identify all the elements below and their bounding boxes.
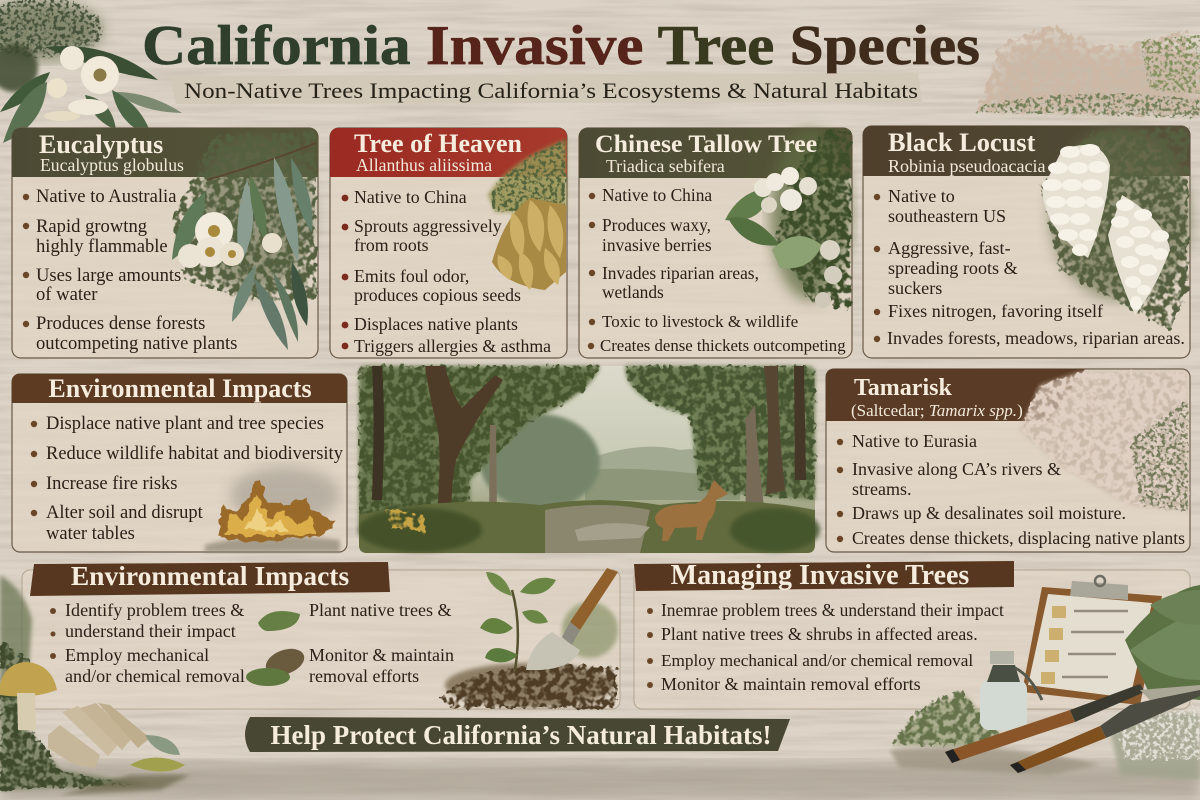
icon: leaves bbox=[246, 611, 308, 686]
text: action list: removal efforts bbox=[309, 666, 419, 686]
text: Eucalyptus facts: Produces dense forests bbox=[36, 313, 205, 334]
header band: Chinese Tallow Tree bbox=[579, 128, 852, 178]
text: Black Locust facts: suckers bbox=[888, 278, 942, 298]
text: Tamarisk facts bbox=[837, 431, 1185, 548]
icon: deer bbox=[655, 480, 728, 541]
decoration: right foliage bbox=[1125, 585, 1200, 700]
text: Chinese Tallow facts: wetlands bbox=[602, 282, 664, 302]
text: Eucalyptus facts: highly flammable bbox=[36, 236, 168, 257]
text: Chinese Tallow facts: Produces waxy, bbox=[602, 215, 711, 235]
text: Tree of Heaven facts bbox=[342, 187, 551, 356]
text: Black Locust facts: spreading roots & bbox=[888, 258, 1018, 278]
text: Tamarisk facts: Creates dense thickets, displacing native plants bbox=[852, 528, 1185, 548]
panel: Black Locust bbox=[863, 126, 1190, 358]
header: Environmental Impacts bbox=[30, 560, 390, 596]
icon: black locust flowers bbox=[1040, 128, 1190, 330]
text: Black Locust facts: southeastern US bbox=[888, 206, 1006, 226]
text: Tree of Heaven facts: Triggers allergies & asthma bbox=[354, 336, 551, 356]
text: Tree of Heaven facts: Native to China bbox=[354, 187, 467, 207]
text: impact list bbox=[31, 414, 344, 544]
text: managing list: Inemrae problem trees & understand their impact bbox=[661, 600, 1004, 620]
header: Environmental Impacts: Environmental Impacts bbox=[48, 374, 312, 403]
text: action list: Identify problem trees & bbox=[65, 600, 244, 620]
text: Black Locust facts bbox=[874, 186, 1185, 348]
text: Eucalyptus facts: Native to Australia bbox=[36, 186, 176, 207]
header band: Eucalyptus bbox=[12, 128, 318, 177]
text: Tamarisk facts: Native to Eurasia bbox=[852, 431, 977, 451]
text: Eucalyptus facts: of water bbox=[36, 284, 98, 305]
header text: Eucalyptus bbox=[39, 130, 184, 175]
header band: Tree of Heaven bbox=[330, 128, 567, 177]
header: Tamarisk: Tamarisk bbox=[854, 375, 952, 401]
text: Black Locust facts: Native to bbox=[888, 186, 955, 206]
panel: Environmental Impacts (upper) bbox=[12, 374, 347, 552]
text: managing list: Plant native trees & shrubs in affected areas. bbox=[661, 624, 978, 644]
text: Black Locust facts: Aggressive, fast- bbox=[888, 238, 1011, 258]
icon: tree of heaven seed clusters bbox=[488, 140, 566, 290]
header text: Eucalyptus: Eucalyptus globulus bbox=[40, 155, 184, 175]
text: action list: Monitor & maintain bbox=[309, 645, 454, 665]
header: Managing Invasive Trees: Managing Invasive Trees bbox=[671, 560, 969, 591]
header: Environmental Impacts: Environmental Impacts bbox=[71, 560, 349, 591]
panel: Tree of Heaven bbox=[330, 128, 567, 358]
decoration: top-right blossoms bbox=[975, 25, 1200, 118]
header: Tamarisk bbox=[826, 369, 1085, 421]
text: Tamarisk facts: streams. bbox=[852, 479, 911, 499]
text: Chinese Tallow facts: Creates dense thickets outcompeting bbox=[600, 336, 846, 355]
text: Tree of Heaven facts: Sprouts aggressively bbox=[354, 216, 502, 236]
text: Chinese Tallow facts: Toxic to livestock & wildlife bbox=[602, 312, 798, 331]
icon: tallow berries bbox=[725, 130, 851, 310]
text: Chinese Tallow facts bbox=[588, 185, 846, 355]
text: action list: understand their impact bbox=[65, 621, 236, 641]
text: Tree of Heaven facts: produces copious seeds bbox=[354, 285, 521, 305]
icon: sprayer bottle bbox=[980, 651, 1042, 730]
text: Eucalyptus facts bbox=[23, 186, 237, 354]
text: impact list: Reduce wildlife habitat and biodiversity bbox=[46, 444, 344, 464]
text: Tamarisk facts: Draws up & desalinates soil moisture. bbox=[852, 503, 1126, 523]
icon: tamarisk shrub bbox=[1020, 372, 1188, 512]
text: Chinese Tallow facts: Native to China bbox=[602, 185, 712, 205]
text: Chinese Tallow facts: Invades riparian areas, bbox=[602, 263, 759, 283]
text: Tree of Heaven facts: Emits foul odor, bbox=[354, 266, 469, 286]
text: impact list: Displace native plant and tree species bbox=[46, 414, 324, 434]
header band: Black Locust bbox=[863, 126, 1190, 176]
text: managing list bbox=[647, 600, 1004, 694]
panel: Eucalyptus bbox=[12, 128, 318, 358]
banner: call to action: Help Protect California’s Natural Habitats! bbox=[271, 720, 771, 750]
text: action list: and/or chemical removal bbox=[65, 666, 245, 686]
text: Chinese Tallow facts: invasive berries bbox=[602, 235, 712, 255]
text: Tree of Heaven facts: from roots bbox=[354, 235, 429, 255]
decoration: left foliage, mushroom and gloves bbox=[0, 575, 190, 795]
header text: Black Locust: Robinia pseudoacacia bbox=[888, 156, 1045, 176]
text: impact list: Increase fire risks bbox=[46, 474, 178, 494]
header text: Eucalyptus: Eucalyptus bbox=[39, 130, 163, 159]
header text: Chinese Tallow Tree: Triadica sebifera bbox=[606, 156, 725, 176]
text: managing list: Employ mechanical and/or chemical removal bbox=[661, 651, 973, 670]
text: Tamarisk facts: Invasive along CA’s rivers & bbox=[852, 459, 1061, 479]
header text: Tree of Heaven: Allanthus aliissima bbox=[356, 155, 492, 175]
header text: Tree of Heaven: Tree of Heaven bbox=[354, 129, 523, 158]
icon: seedling and trowel bbox=[440, 568, 618, 708]
text: managing list: Monitor & maintain removal efforts bbox=[661, 674, 921, 694]
text: impact list: water tables bbox=[46, 524, 135, 544]
header text: Black Locust: Black Locust bbox=[888, 127, 1036, 157]
header text: Tree of Heaven bbox=[354, 129, 523, 175]
subtitle banner: Non-Native Trees Impacting California’s Ecosystems & Natural Habitats bbox=[184, 78, 918, 103]
decoration: top-left eucalyptus flowers bbox=[0, 0, 182, 143]
icon: pruning shears bbox=[945, 684, 1200, 773]
text: Eucalyptus facts: Rapid growtng bbox=[36, 216, 147, 237]
text: Eucalyptus facts: Uses large amounts bbox=[36, 265, 181, 286]
header text: Chinese Tallow Tree bbox=[595, 129, 817, 176]
panel: Tamarisk bbox=[826, 369, 1190, 552]
icon: clipboard checklist bbox=[1022, 576, 1162, 705]
text: Eucalyptus facts: outcompeting native plants bbox=[36, 333, 237, 354]
panel: Managing Invasive Trees bbox=[634, 560, 1190, 709]
icon: fire bbox=[205, 467, 340, 552]
decoration: bottom-right ground and flowers bbox=[890, 690, 1200, 780]
header text: Chinese Tallow Tree: Chinese Tallow Tree bbox=[595, 129, 817, 158]
panel: Chinese Tallow Tree bbox=[579, 128, 852, 358]
header: Tamarisk: (Saltcedar; Tamarix spp.) bbox=[851, 401, 1023, 420]
title: California Invasive Tree Species bbox=[142, 15, 980, 77]
header text: Black Locust bbox=[888, 127, 1045, 176]
text: Tree of Heaven facts: Displaces native plants bbox=[354, 314, 518, 334]
text: action list: Employ mechanical bbox=[65, 645, 209, 665]
text: Black Locust facts: Invades forests, meadows, riparian areas. bbox=[887, 328, 1185, 348]
text: action list bbox=[50, 600, 454, 686]
text: Black Locust facts: Fixes nitrogen, favoring itself bbox=[888, 301, 1104, 321]
icon: eucalyptus branch bbox=[172, 132, 316, 350]
text: action list: Plant native trees & bbox=[309, 600, 451, 620]
illustration: forest scene with deer bbox=[358, 366, 820, 553]
text: impact list: Alter soil and disrupt bbox=[46, 503, 204, 523]
panel: Environmental Impacts (actions) bbox=[22, 560, 620, 709]
